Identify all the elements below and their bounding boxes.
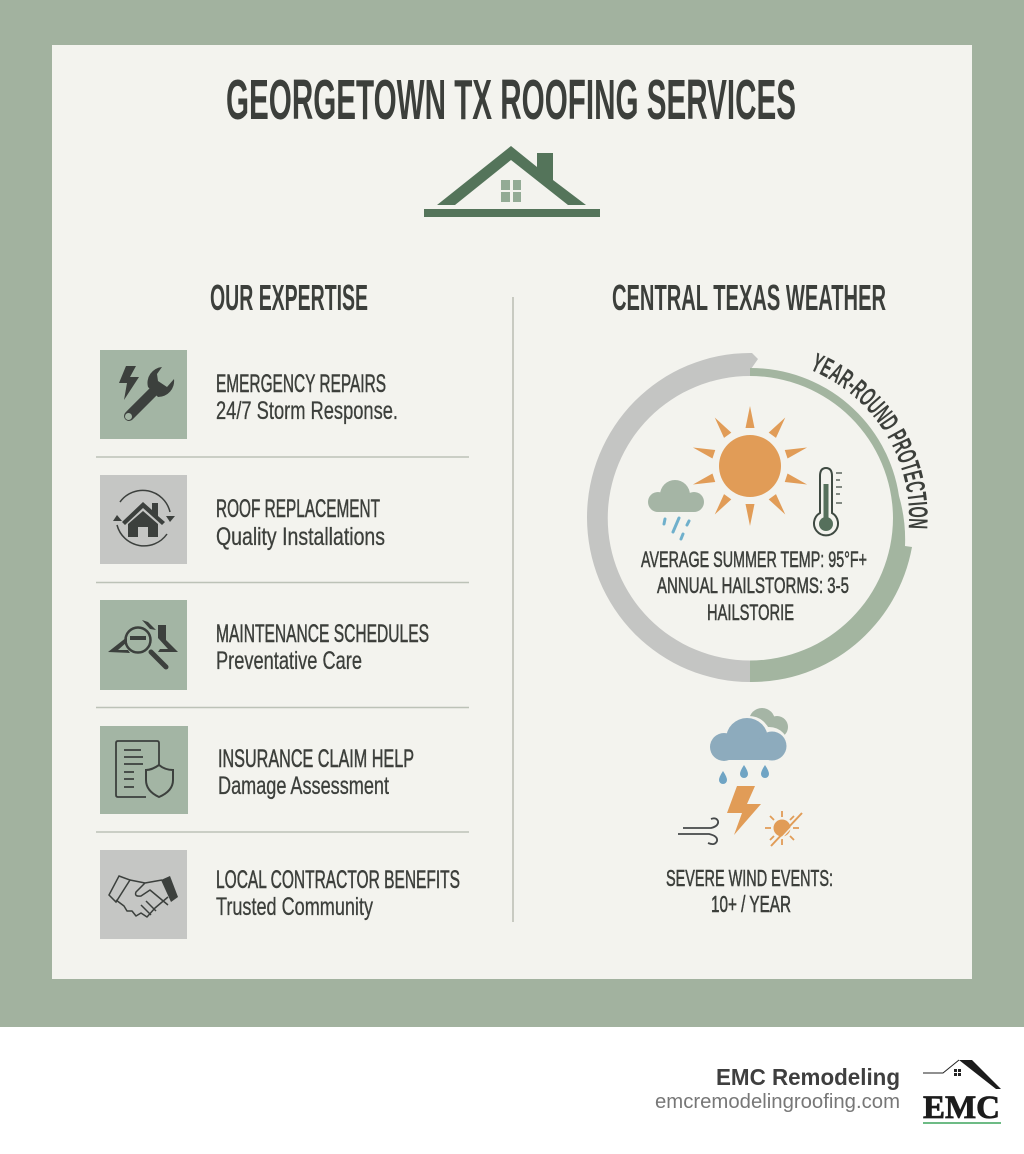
icon: roof and magnifier	[100, 600, 187, 690]
stat: hailstorie: HAILSTORIE	[707, 600, 794, 625]
stat: annual hailstorms: ANNUAL HAILSTORMS: 3-5	[657, 573, 849, 598]
icon: document and shield	[100, 726, 188, 814]
description: storm response: 24/7 Storm Response.	[216, 397, 398, 425]
curved label: year-round protection: YEAR-ROUND PROTECTION	[813, 352, 928, 528]
description: preventative care: Preventative Care	[216, 647, 362, 675]
stat: severe wind events	[666, 865, 833, 917]
icon: rain cloud	[648, 480, 704, 539]
label: local contractor benefits: LOCAL CONTRACTOR BENEFITS	[216, 866, 460, 894]
list item: insurance claim help	[100, 726, 414, 814]
footer: website: emcremodelingroofing.com	[655, 1090, 900, 1113]
icon: sun	[692, 406, 808, 526]
description: damage assessment: Damage Assessment	[218, 772, 389, 800]
description: trusted community: Trusted Community	[216, 893, 373, 921]
heading: our expertise: OUR EXPERTISE	[210, 277, 368, 318]
list item: maintenance schedules	[100, 600, 429, 690]
label: roof replacement: ROOF REPLACEMENT	[216, 495, 380, 523]
label: insurance claim help: INSURANCE CLAIM HELP	[218, 745, 414, 773]
stat: severe wind events: 10+ / YEAR	[711, 891, 791, 917]
icon: thermometer	[814, 468, 842, 535]
description: quality installations: Quality Installations	[216, 523, 385, 551]
stat: average summer temp: AVERAGE SUMMER TEMP: 95°F+	[641, 547, 867, 572]
list item: roof replacement	[100, 475, 385, 564]
icon: storm group	[678, 708, 802, 846]
stats text	[641, 547, 867, 625]
label: emergency repairs: EMERGENCY REPAIRS	[216, 370, 386, 398]
label: maintenance schedules: MAINTENANCE SCHEDULES	[216, 620, 429, 648]
footer: brand name: EMC Remodeling	[716, 1064, 900, 1090]
icon: house with circular arrows	[100, 475, 187, 564]
footer logo: EMC	[923, 1060, 1001, 1126]
footer logo: EMC: EMC	[923, 1090, 1000, 1126]
icon: handshake	[100, 850, 187, 939]
icon: lightning and wrench	[100, 350, 187, 439]
stat: severe wind events: SEVERE WIND EVENTS:	[666, 865, 833, 891]
panel: main card	[52, 45, 972, 979]
icon: house roof logo	[424, 146, 600, 217]
list item: emergency repairs	[100, 350, 398, 439]
chart: year-round ring	[587, 353, 912, 682]
list item: local contractor benefits	[100, 850, 460, 939]
